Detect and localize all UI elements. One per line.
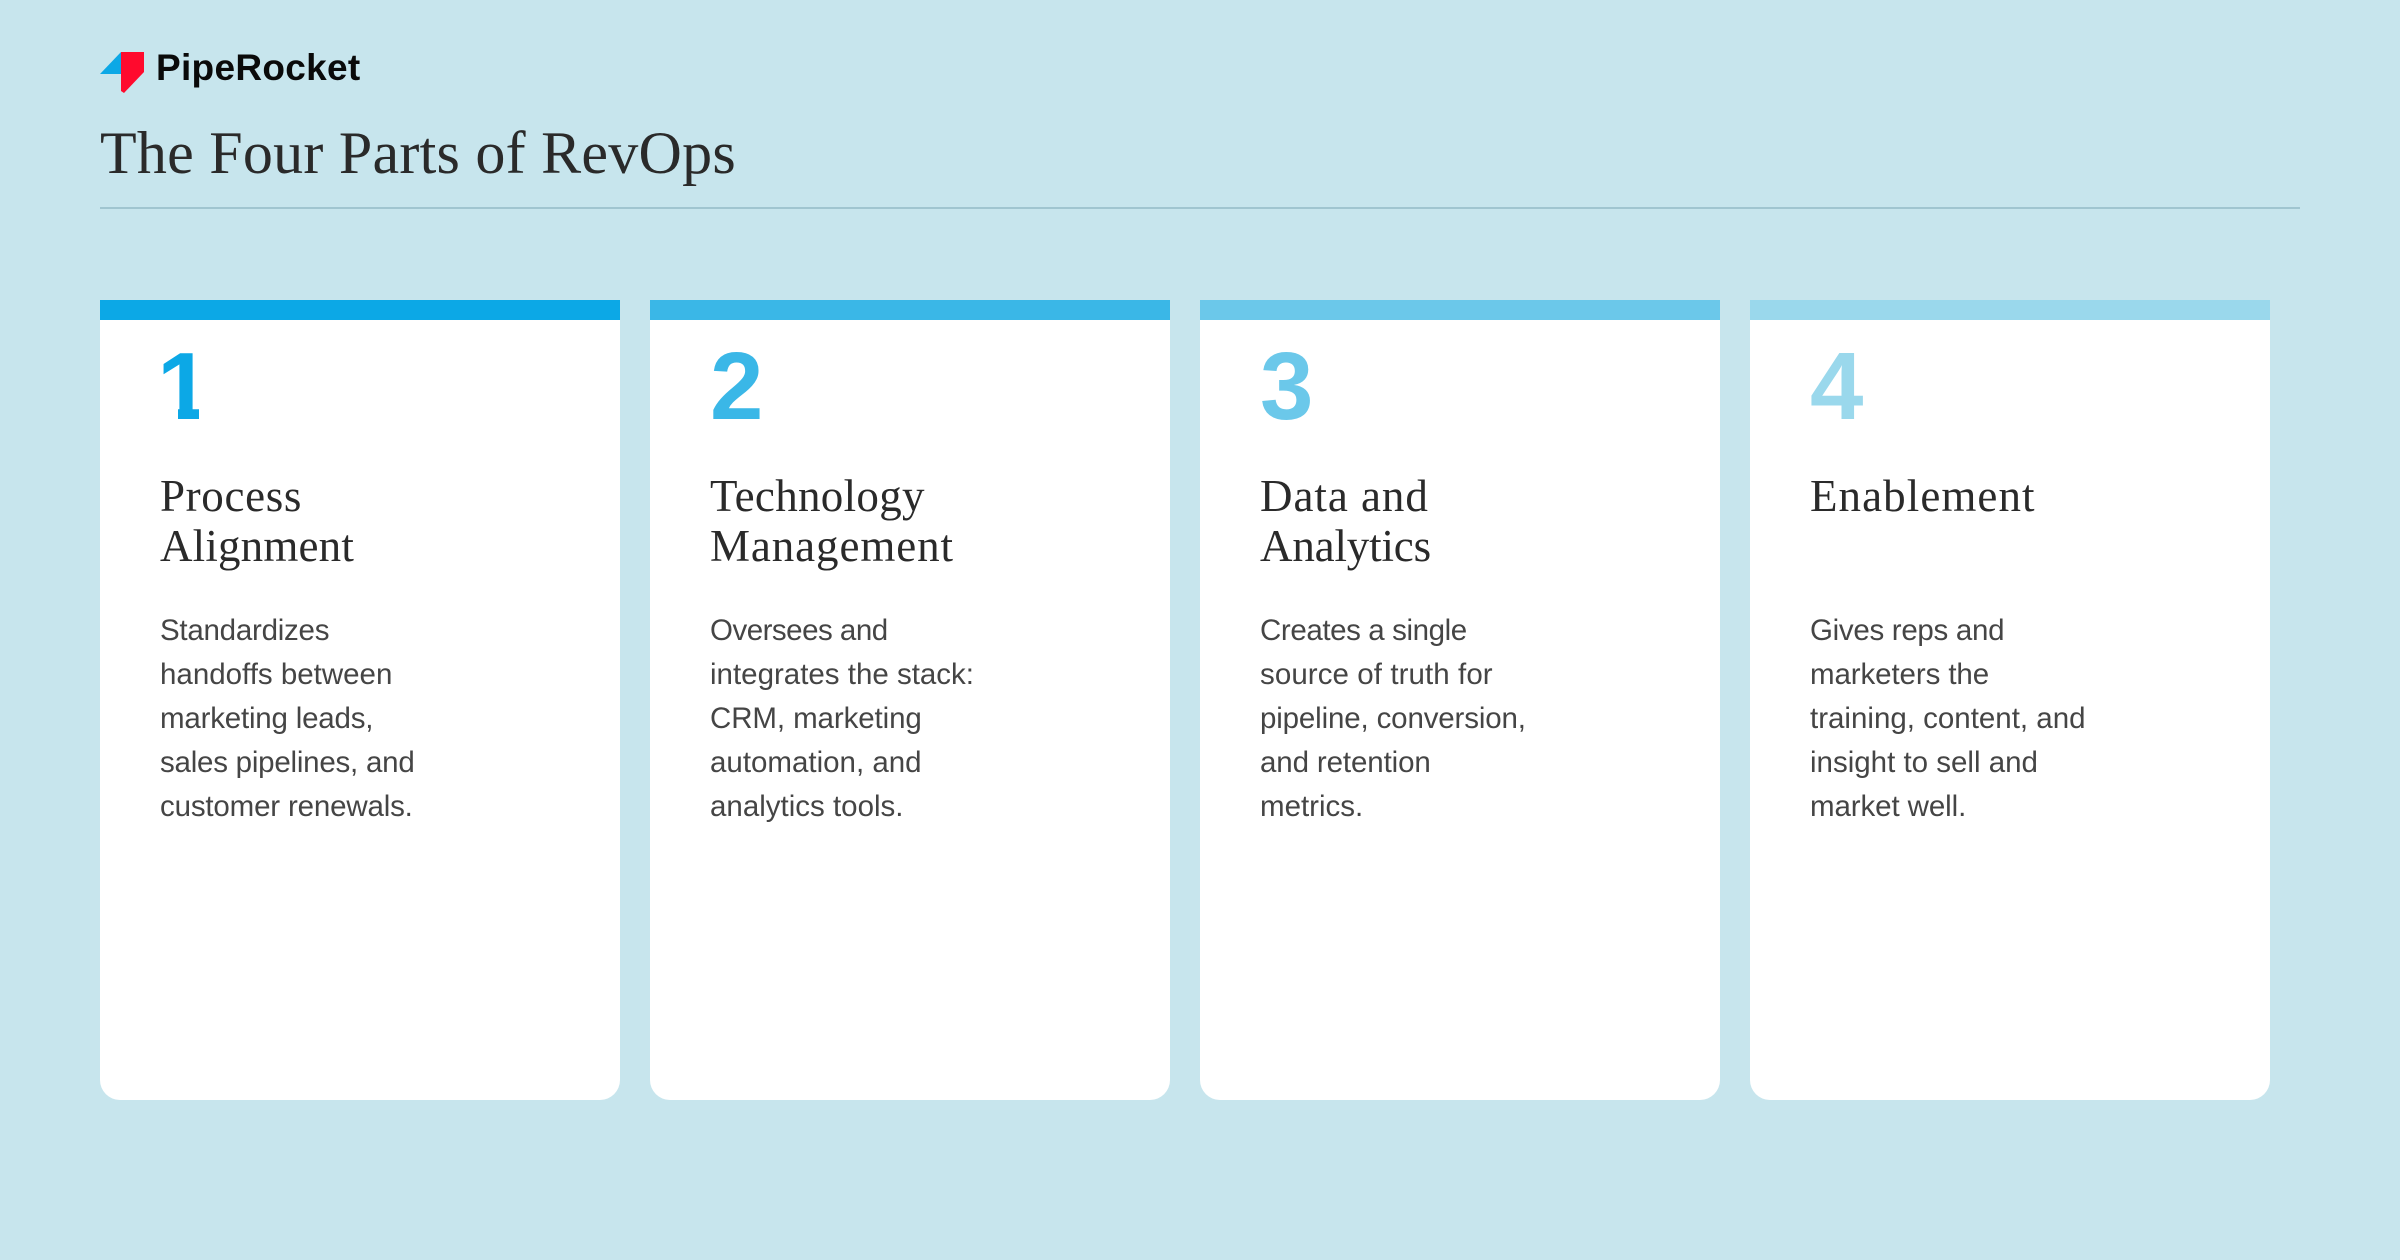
body text: analytics tools. [710,790,903,823]
body text: sales pipelines, and [160,746,415,779]
heading: technology management [710,471,954,571]
body text: training, content, and [1810,702,2086,735]
panel: technology management [650,300,1170,1100]
body text: pipeline, conversion, [1260,702,1526,735]
heading: process alignment [160,471,354,571]
body text [1260,614,1526,823]
body text: CRM, marketing [710,702,922,735]
body text: metrics. [1260,790,1363,823]
number 4: 4 [1810,333,1863,440]
heading: technology management: Technology [710,471,925,521]
body text: marketing leads, [160,702,373,735]
heading: technology management: Management [710,521,954,571]
panel: process alignment [100,300,620,1100]
logo wordmark: PipeRocket [156,47,361,88]
body text [1810,614,2086,823]
panel: enablement [1750,300,2270,1100]
heading: data and analytics: Data and [1260,471,1429,521]
heading: data and analytics [1260,471,1431,571]
heading: enablement: Enablement [1810,471,2036,521]
body text: marketers the [1810,658,1989,691]
body text: Standardizes [160,614,329,647]
body text: Gives reps and [1810,614,2004,647]
body text: source of truth for [1260,658,1493,691]
body text: and retention [1260,746,1431,779]
body text: Creates a single [1260,614,1467,647]
body text: market well. [1810,790,1966,823]
panel: data and analytics [1200,300,1720,1100]
heading: process alignment: Process [160,471,302,521]
body text [160,614,415,823]
body text: automation, and [710,746,922,779]
number 1: 1 [157,333,210,440]
body text: insight to sell and [1810,746,2038,779]
body text: integrates the stack: [710,658,974,691]
heading: process alignment: Alignment [160,521,354,571]
body text: customer renewals. [160,790,413,823]
logo: PipeRocket [100,47,361,93]
title: The Four Parts of RevOps [100,120,736,186]
heading: data and analytics: Analytics [1260,521,1431,571]
number 3: 3 [1260,333,1313,440]
number 2: 2 [710,333,763,440]
icon: rocket mark [100,52,144,93]
body text: handoffs between [160,658,392,691]
body text: Oversees and [710,614,888,647]
body text [710,614,974,823]
